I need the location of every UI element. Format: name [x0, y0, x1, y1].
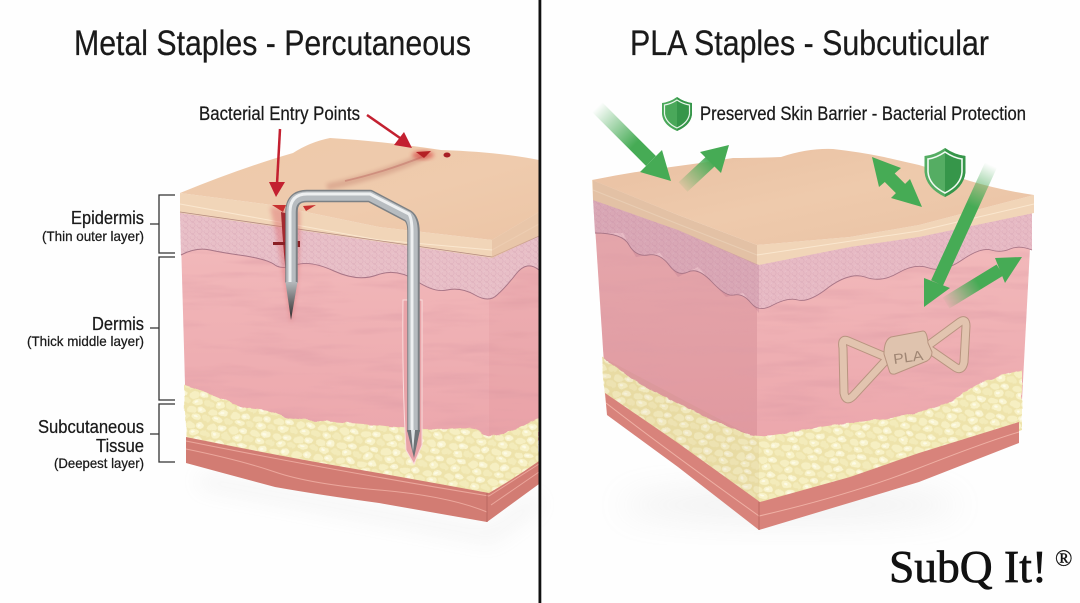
skin block: PLA staple cross-section: [592, 149, 1034, 530]
wound channel: right leg: [403, 300, 422, 464]
fascia layer: [605, 393, 1019, 530]
callout: preserved skin barrier: [662, 97, 1026, 131]
arrow: deep inbound: [924, 165, 991, 307]
icon: large shield: [924, 148, 966, 197]
label: dermis: Dermis: [92, 314, 144, 334]
label: epidermis: (Thin outer layer): [42, 228, 144, 244]
stratum corneum band: [180, 193, 539, 258]
icon: small shield: [662, 97, 692, 131]
incision on surface: [327, 151, 450, 187]
panel: PLA staples: [592, 24, 1072, 592]
callout: bacterial entry points: Bacterial Entry Points: [199, 104, 360, 125]
epidermis cellular layer: [180, 212, 539, 299]
label: dermis: (Thick middle layer): [27, 333, 144, 349]
wound channel: left leg: [270, 205, 316, 324]
label: dermis: [27, 257, 175, 400]
skin block: metal staple cross-section: [180, 138, 539, 535]
callout: preserved skin barrier: Preserved Skin Barrier - Bacterial Protection: [700, 104, 1026, 125]
epidermis cellular layer: [593, 198, 1032, 313]
arrow: bacteria deflected, inbound left: [597, 107, 671, 181]
arrow: deep outbound: [946, 257, 1022, 303]
callout: bacterial entry points: [199, 104, 412, 197]
layer labels: [27, 195, 175, 471]
arrow: to right entry point: [367, 115, 412, 148]
dermis: right face: [757, 210, 1032, 470]
fascia layer: [186, 437, 539, 522]
fat layer: [602, 357, 1022, 510]
center divider: [538, 0, 541, 603]
metal staple: [286, 194, 420, 458]
skin top surface: [592, 149, 1034, 245]
logo: SubQ It!: ®: [1055, 546, 1072, 571]
logo: SubQ It!: SubQ It!: [889, 541, 1047, 592]
title: PLA staples: PLA Staples - Subcuticular: [630, 24, 989, 63]
panel: metal staples: [27, 24, 539, 535]
stratum corneum band: [592, 180, 1034, 265]
title: metal staples: Metal Staples - Percutaneous: [74, 24, 471, 63]
arrow: bacteria deflected, outbound left: [683, 145, 729, 187]
label: epidermis: [42, 195, 175, 253]
right face corner: [492, 212, 539, 258]
label: subcutaneous tissue: Tissue: [96, 436, 144, 456]
PLA staple device: [843, 321, 966, 399]
skin top surface: [180, 138, 539, 240]
arrow: two-way barrier exchange: [872, 157, 922, 207]
label: epidermis: Epidermis: [71, 208, 144, 228]
fat layer: [184, 385, 539, 496]
dermis: left face: [593, 195, 757, 470]
label: subcutaneous tissue: [38, 404, 175, 471]
label: subcutaneous tissue: (Deepest layer): [54, 455, 144, 471]
dermis layer: [180, 205, 539, 470]
arrow: to left entry point: [269, 129, 285, 197]
label: subcutaneous tissue: Subcutaneous: [38, 417, 144, 437]
label: PLA: PLA: [892, 347, 925, 367]
